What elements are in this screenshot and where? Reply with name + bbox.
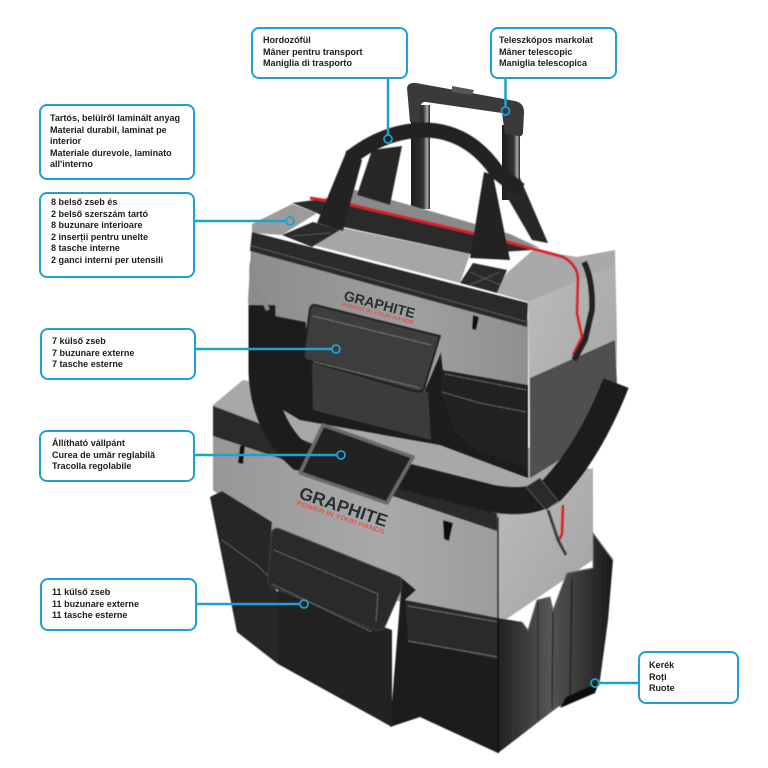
upper front top flap bbox=[313, 228, 470, 283]
lower side zipper tail bbox=[558, 505, 563, 542]
main lower pocket bbox=[278, 590, 392, 727]
callout: carry handle: Mâner pentru transport bbox=[263, 47, 363, 57]
callout: interior pockets: 2 ganci interni per utensili bbox=[51, 255, 163, 265]
right front pockets bbox=[390, 578, 498, 753]
callout: interior pockets: 8 tasche interne bbox=[51, 243, 120, 253]
upper bag side bbox=[528, 250, 617, 478]
upper front band bbox=[250, 232, 528, 327]
callout: 7 outer pockets: 7 külső zseb bbox=[52, 336, 106, 346]
callout: interior pockets: 2 inserții pentru unelte bbox=[51, 232, 148, 242]
callout: 11 outer pockets: 11 tasche esterne bbox=[52, 610, 127, 620]
upper side pocket bbox=[441, 370, 528, 468]
callout connectors and markers bbox=[194, 78, 640, 687]
upper logo: GRAPHITE bbox=[342, 287, 417, 321]
upper bag front bbox=[248, 250, 528, 478]
upper front flap bbox=[304, 305, 440, 392]
upper right top flap bbox=[493, 250, 615, 302]
callout: 11 outer pockets: 11 külső zseb bbox=[52, 587, 110, 597]
callout: wheels: Roți bbox=[649, 672, 667, 682]
callout: interior pockets bbox=[39, 192, 195, 278]
callout: wheels bbox=[638, 651, 739, 704]
trolley telescopic handle bbox=[407, 83, 524, 209]
callout: telescopic handle: Teleszkópos markolat bbox=[499, 35, 593, 45]
callout: 11 outer pockets: 11 buzunare externe bbox=[52, 599, 139, 609]
lower logo: GRAPHITE bbox=[297, 483, 390, 531]
callout: telescopic handle: Mâner telescopic bbox=[499, 47, 572, 57]
callout: carry handle: Maniglia di trasporto bbox=[263, 58, 352, 68]
callout: durable material: Tartós, belülről laminált anyag bbox=[50, 113, 180, 123]
upper logo: POWER IN YOUR HANDS bbox=[341, 302, 414, 326]
lower bag front panel bbox=[213, 405, 498, 625]
callout: durable material: Material durabil, laminat pe bbox=[50, 125, 167, 135]
callout: 7 outer pockets: 7 tasche esterne bbox=[52, 359, 123, 369]
lower wheel bbox=[560, 683, 597, 708]
carry handle front legs bbox=[317, 150, 510, 260]
lower bag top bbox=[213, 380, 593, 520]
shoulder strap bbox=[262, 305, 616, 501]
lower bag bbox=[210, 380, 613, 753]
callout: interior pockets: 8 belső zseb és bbox=[51, 197, 117, 207]
callout: 7 outer pockets bbox=[40, 328, 196, 380]
callout: telescopic handle bbox=[490, 27, 617, 79]
upper top left corner bbox=[252, 204, 317, 235]
strap hook bbox=[251, 262, 268, 310]
upper bag lower dark zone bbox=[255, 312, 528, 478]
lower bag top band bbox=[213, 406, 497, 531]
lower logo: POWER IN YOUR HANDS bbox=[295, 500, 386, 536]
callout: wheels: Ruote bbox=[649, 683, 675, 693]
zipper pullers bbox=[238, 445, 453, 541]
lower bag side panel bbox=[498, 468, 593, 625]
upper corner tabs bbox=[282, 222, 507, 293]
upper bag bbox=[248, 130, 617, 510]
callout: wheels: Kerék bbox=[649, 660, 674, 670]
back grey top edge bbox=[348, 188, 540, 248]
callout: carry handle bbox=[251, 27, 408, 79]
callout: carry handle: Hordozófül bbox=[263, 35, 311, 45]
upper front pocket bbox=[312, 363, 431, 440]
upper zipper band bbox=[292, 198, 575, 258]
upper red zipper bbox=[310, 198, 582, 355]
back carry handle legs bbox=[357, 146, 548, 243]
callout: 11 outer pockets bbox=[40, 578, 197, 631]
strap buckle bbox=[526, 478, 558, 510]
left pockets bbox=[210, 491, 278, 664]
callout: adjustable shoulder strap: Állítható vállpánt bbox=[52, 438, 125, 448]
main lower flap bbox=[268, 528, 402, 630]
callout: adjustable shoulder strap: Tracolla regolabile bbox=[52, 461, 131, 471]
callout: adjustable shoulder strap: Curea de umăr reglabilă bbox=[52, 450, 155, 460]
carry handle grip bbox=[350, 130, 520, 190]
callout: durable material bbox=[39, 104, 195, 180]
callout: durable material: all'interno bbox=[50, 159, 93, 169]
callout: durable material: Materiale durevole, laminato bbox=[50, 148, 172, 158]
callout: durable material: interior bbox=[50, 136, 81, 146]
callout: telescopic handle: Maniglia telescopica bbox=[499, 58, 587, 68]
lower side pockets bbox=[498, 533, 613, 753]
callout: adjustable shoulder strap bbox=[39, 430, 195, 482]
callout: 7 outer pockets: 7 buzunare externe bbox=[52, 348, 134, 358]
callout: interior pockets: 8 buzunare interioare bbox=[51, 220, 142, 230]
strap pad bbox=[300, 425, 413, 503]
callout: interior pockets: 2 belső szerszám tartó bbox=[51, 209, 148, 219]
